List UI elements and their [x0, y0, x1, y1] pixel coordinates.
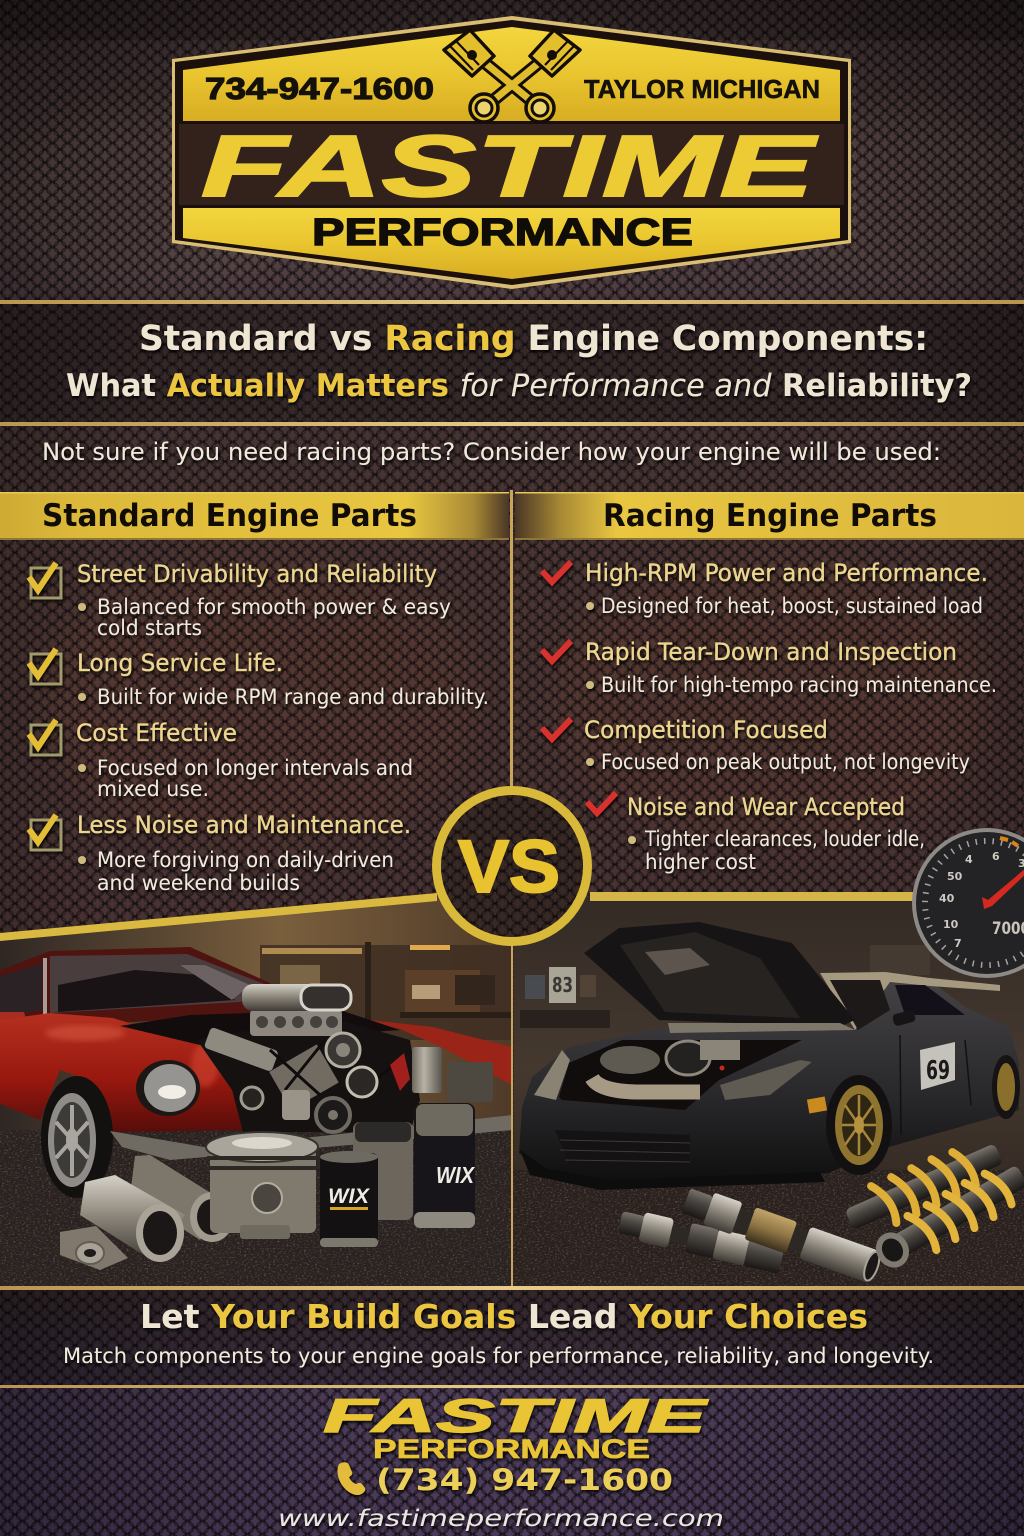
- item: street drivability: Street Drivability and Reliability: [77, 560, 437, 588]
- item: street drivability: cold starts: [97, 616, 202, 640]
- car body: [0, 947, 512, 1145]
- item: cost effective: Focused on longer intervals and: [97, 756, 413, 780]
- item: less noise: Less Noise and Maintenance.: [77, 811, 411, 839]
- item: competition focused: [542, 716, 970, 774]
- gold trim above right photo: [590, 892, 915, 901]
- title line 2: What Actually Matters for Performance and Reliability?: [66, 368, 972, 404]
- item: noise and wear: Tighter clearances, louder idle,: [644, 827, 925, 851]
- panel: racing engine parts: [515, 492, 1024, 874]
- performance wordmark: PERFORMANCE: [312, 212, 693, 254]
- footer logo: [323, 1389, 709, 1464]
- headlight: [136, 1060, 200, 1116]
- item: noise and wear: [587, 793, 925, 874]
- intro sentence: Not sure if you need racing parts? Consider how your engine will be used:: [42, 438, 941, 466]
- location: TAYLOR MICHIGAN: [584, 74, 820, 104]
- item: less noise: [29, 811, 411, 895]
- filter canisters: [320, 1103, 475, 1247]
- title: [66, 319, 972, 404]
- closing sentence: Match components to your engine goals for performance, reliability, and longevity.: [63, 1344, 934, 1368]
- tachometer gauge: 10: [943, 918, 959, 931]
- tachometer gauge: 6: [992, 850, 1000, 863]
- bottom divider 1: [0, 1286, 1024, 1290]
- center divider: [510, 490, 513, 1290]
- item: high rpm: High-RPM Power and Performance.: [585, 559, 988, 587]
- engine: [197, 1010, 493, 1132]
- item: street drivability: Balanced for smooth power & easy: [97, 595, 451, 619]
- piston: [206, 1132, 318, 1239]
- bottom divider 2: [0, 1385, 1024, 1388]
- item: cost effective: mixed use.: [97, 777, 209, 801]
- garage shelves: [260, 942, 512, 1042]
- item: long service life: Built for wide RPM range and durability.: [97, 685, 489, 709]
- item: cost effective: Cost Effective: [76, 719, 237, 747]
- logo badge: [172, 16, 851, 289]
- wheels: [826, 1055, 1020, 1175]
- VS badge: VS: [458, 825, 560, 908]
- item: long service life: Long Service Life.: [77, 649, 283, 677]
- race car body: [519, 972, 1019, 1190]
- item: competition focused: Focused on peak output, not longevity: [601, 750, 970, 774]
- pipes: [60, 1155, 234, 1270]
- wall sign: [549, 967, 576, 1003]
- engine bay: [559, 1040, 802, 1110]
- item: high rpm: [542, 559, 988, 618]
- gold trim above left photo: [0, 893, 437, 941]
- footer logo: FASTIME: [323, 1389, 709, 1442]
- tachometer gauge: 50: [947, 870, 963, 883]
- footer logo: PERFORMANCE: [373, 1434, 650, 1464]
- number plate: 69: [926, 1056, 950, 1086]
- number plate: [920, 1042, 955, 1090]
- header band: racing: Racing Engine Parts: [603, 498, 937, 534]
- bumper: [110, 1115, 512, 1160]
- title divider: [0, 422, 1024, 426]
- brand name: FASTIME: [201, 118, 819, 215]
- closing headline: Let Your Build Goals Lead Your Choices: [140, 1297, 868, 1336]
- coilovers: [846, 1145, 1024, 1268]
- header band: standard: [0, 492, 509, 540]
- item: rapid tear-down: Rapid Tear-Down and Inspection: [585, 638, 957, 666]
- WIX label short: WIX: [328, 1185, 371, 1208]
- item: rapid tear-down: [542, 638, 997, 697]
- cams: [617, 1184, 883, 1284]
- header band: standard: Standard Engine Parts: [42, 498, 417, 534]
- VS badge: [432, 786, 592, 946]
- panel: standard engine parts: [0, 492, 509, 895]
- item: competition focused: Competition Focused: [584, 716, 828, 744]
- top divider: [0, 300, 1024, 304]
- item: less noise: and weekend builds: [97, 871, 300, 895]
- tachometer gauge: 4: [965, 853, 973, 866]
- title line 1: Standard vs Racing Engine Components:: [139, 319, 928, 359]
- phone number: 734-947-1600: [205, 71, 434, 106]
- tachometer gauge: 7: [954, 937, 962, 950]
- item: cost effective: [29, 719, 413, 801]
- tachometer gauge: [912, 828, 1024, 978]
- icon: crossed pistons: [444, 30, 580, 122]
- icon: phone: [337, 1462, 365, 1495]
- WIX label tall: WIX: [436, 1162, 475, 1188]
- item: noise and wear: Noise and Wear Accepted: [627, 793, 905, 821]
- wall sign: 83: [552, 973, 573, 997]
- item: high rpm: Designed for heat, boost, sustained load: [601, 594, 983, 618]
- item: rapid tear-down: Built for high-tempo racing maintenance.: [601, 673, 997, 697]
- item: street drivability: [29, 560, 451, 640]
- footer phone number: (734) 947-1600: [376, 1463, 673, 1497]
- item: noise and wear: higher cost: [645, 850, 756, 874]
- header band: racing: [515, 492, 1024, 540]
- wheel: [41, 1076, 113, 1198]
- tachometer gauge: 40: [939, 892, 955, 905]
- item: less noise: More forgiving on daily-driven: [97, 848, 394, 872]
- photo: red street car with parts: [0, 890, 512, 1290]
- item: long service life: [29, 649, 489, 709]
- photo: black race car with parts: [514, 890, 1024, 1290]
- open hood: [584, 922, 855, 1033]
- website: www.fastimeperformance.com: [278, 1506, 724, 1532]
- blower scoop: [242, 984, 352, 1011]
